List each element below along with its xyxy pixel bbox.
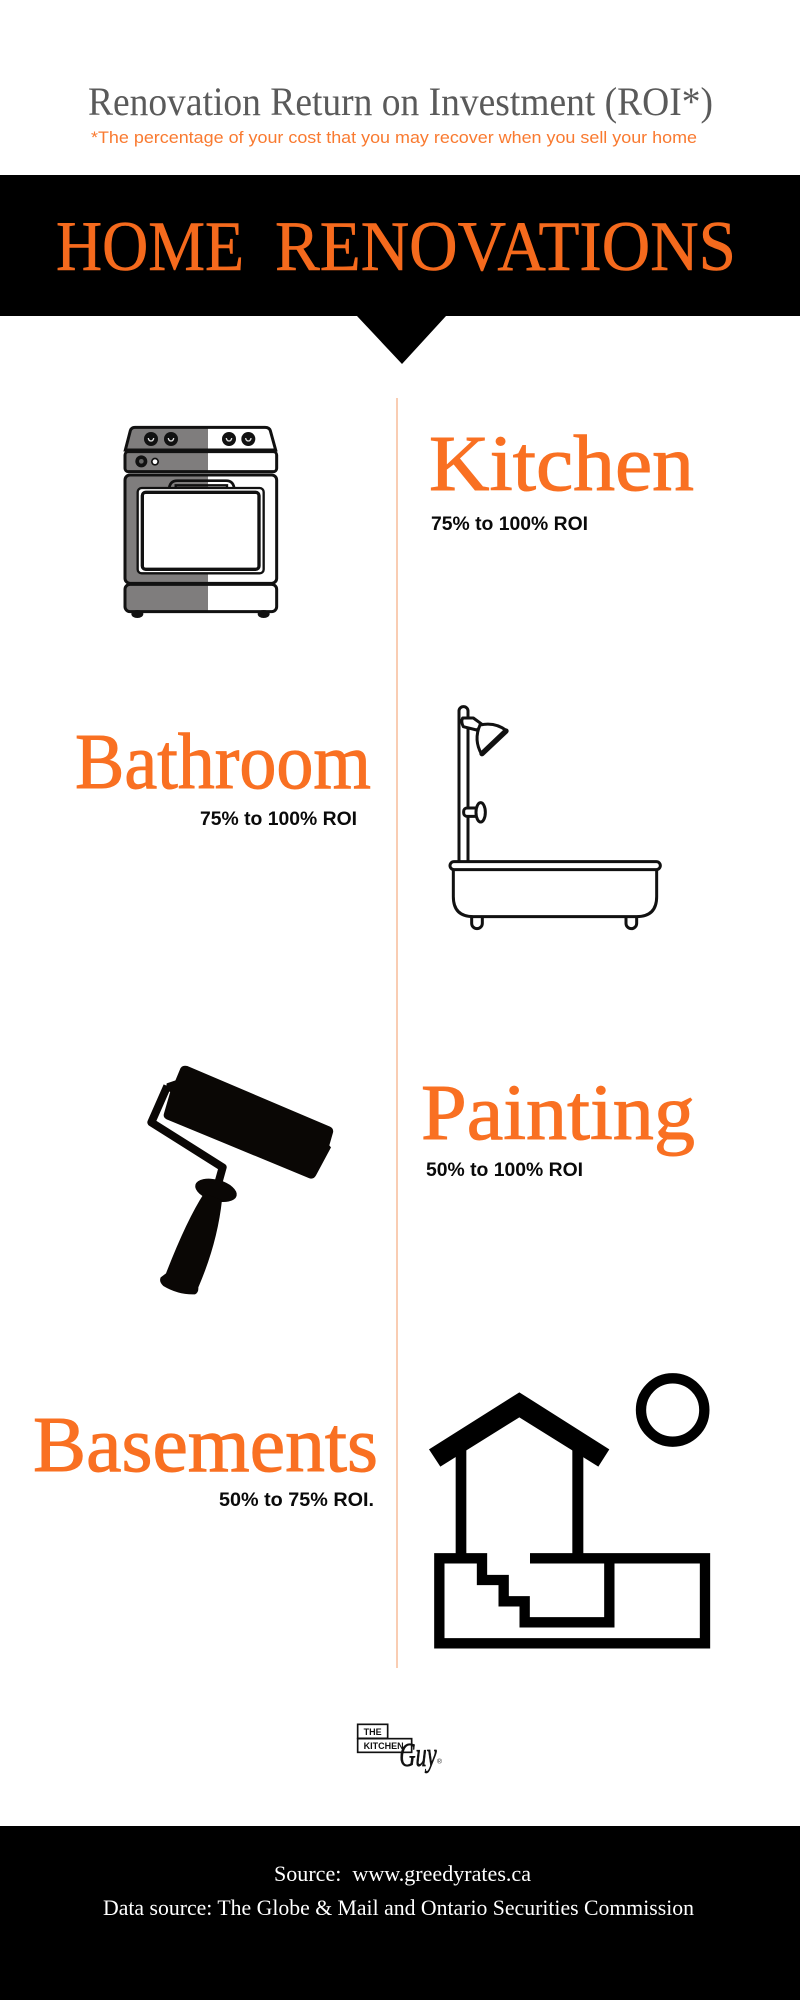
section: painting — [421, 1070, 695, 1181]
icon: stove — [125, 427, 277, 618]
subtitle: *The percentage of your cost that you may recover when you sell your home — [91, 128, 697, 147]
icon: shower and bathtub — [450, 707, 660, 929]
source line: Source: www.greedyrates.ca — [274, 1861, 531, 1886]
kitchen heading: Kitchen — [429, 421, 694, 508]
painting heading: Painting — [421, 1070, 695, 1157]
footer — [0, 1826, 800, 2000]
logo: ® — [437, 1757, 442, 1765]
kitchen ROI: 75% to 100% ROI — [431, 514, 588, 535]
banner heading: RENOVATIONS — [275, 208, 736, 286]
logo: THE — [364, 1727, 382, 1737]
section: basements — [33, 1402, 378, 1511]
data source line: Data source: The Globe & Mail and Ontario Securities Commission — [103, 1895, 694, 1920]
icon: paint roller — [151, 1066, 333, 1294]
title: Renovation Return on Investment (ROI*) — [88, 79, 713, 124]
logo: KITCHEN — [364, 1741, 404, 1751]
basements heading: Basements — [33, 1402, 378, 1489]
bathroom ROI: 75% to 100% ROI — [200, 809, 357, 830]
bathroom heading: Bathroom — [75, 719, 371, 806]
section: bathroom — [75, 719, 371, 830]
logo — [358, 1724, 442, 1774]
icon: house with basement — [429, 1378, 705, 1643]
painting ROI: 50% to 100% ROI — [426, 1160, 583, 1181]
section: kitchen — [429, 421, 694, 535]
logo: Guy — [399, 1737, 437, 1774]
banner heading: HOME — [56, 208, 244, 286]
basements ROI: 50% to 75% ROI. — [219, 1490, 374, 1511]
banner — [0, 175, 800, 364]
